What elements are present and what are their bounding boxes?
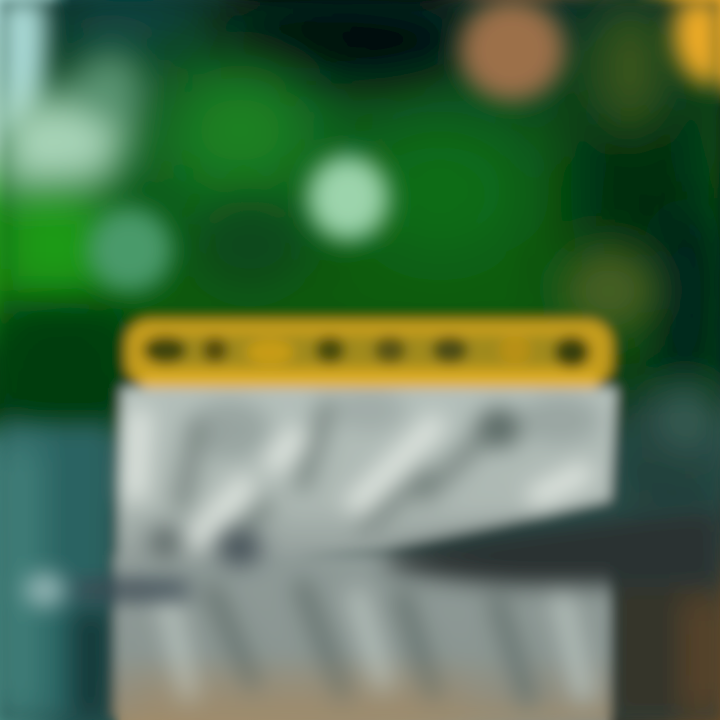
- lower background surface: [0, 388, 720, 720]
- gold band: [126, 320, 612, 388]
- marble block reflection: [115, 555, 610, 720]
- background bokeh and foliage: [0, 0, 720, 425]
- marble block: [118, 388, 616, 566]
- shadow beneath block: [25, 510, 720, 606]
